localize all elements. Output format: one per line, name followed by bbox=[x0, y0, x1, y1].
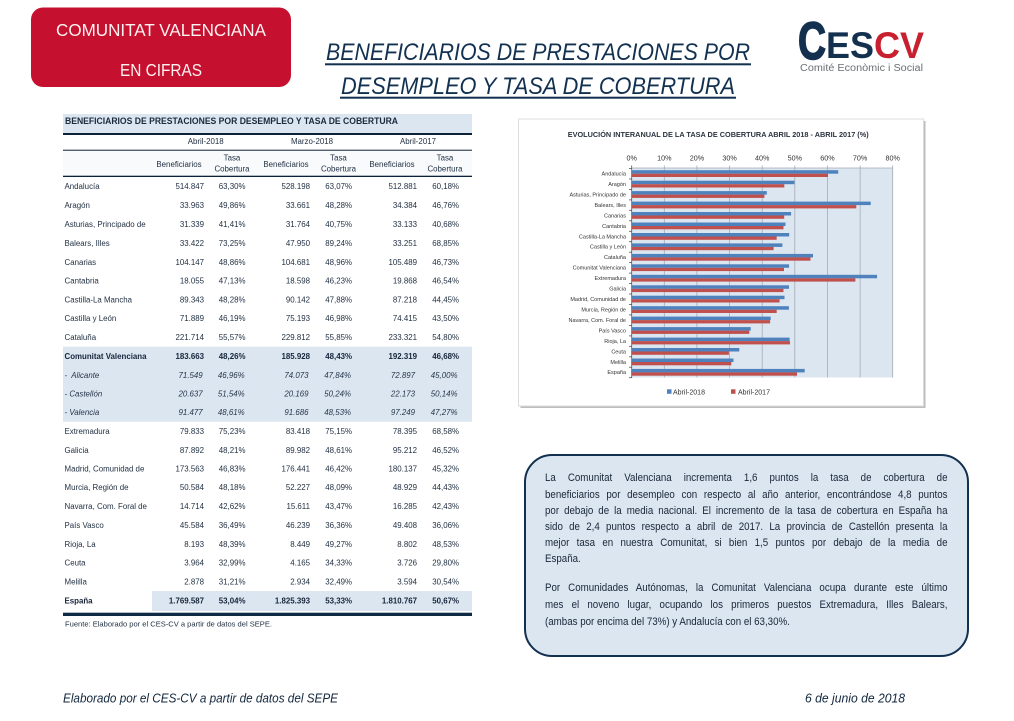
row: Melilla: 2.878 bbox=[184, 578, 205, 586]
row: Rioja bbox=[64, 540, 459, 549]
row: Madrid: 180.137 bbox=[388, 464, 417, 474]
chart legend: Abril-2017 bbox=[738, 390, 770, 396]
row: Castellón: 50,24% bbox=[324, 390, 351, 398]
row: Valencia: 91.477 bbox=[179, 408, 203, 417]
row: Asturias: 33.133 bbox=[393, 220, 418, 229]
row: Castellón bbox=[64, 390, 458, 398]
row: Melilla: 31,21% bbox=[219, 578, 246, 586]
row: Balears: 33.251 bbox=[393, 239, 417, 248]
row: Cantabria: 18.598 bbox=[286, 276, 311, 286]
row: Balears: 73,25% bbox=[219, 239, 246, 248]
row: Cantabria: 18.055 bbox=[180, 276, 205, 286]
chart x axis labels: 20% bbox=[690, 154, 705, 163]
row: Navarra bbox=[64, 502, 459, 511]
row: Andalucía: 512.881 bbox=[388, 182, 417, 191]
row: Aragón: 33.963 bbox=[180, 201, 205, 210]
table column headers: Tasa bbox=[224, 154, 241, 162]
row: Castilla y León: 46,98% bbox=[325, 314, 352, 323]
row: Madrid bbox=[64, 464, 459, 474]
row: Murcia: 44,43% bbox=[432, 483, 459, 492]
chart category labels: Extremadura bbox=[594, 276, 627, 282]
row: España: 1.825.393 bbox=[275, 596, 311, 606]
row: Rioja: 8.193 bbox=[184, 540, 205, 549]
row: Comunitat Valenciana: 48,26% bbox=[219, 352, 246, 361]
table column headers: Cobertura bbox=[214, 165, 250, 174]
row: Extremadura: 75,15% bbox=[325, 427, 352, 436]
row: Valencia: 47,27% bbox=[431, 408, 458, 417]
footer source: Elaborado por el CES-CV a partir de datos del SEPE bbox=[63, 690, 338, 706]
chart plot area bbox=[632, 168, 893, 378]
callout: text commentary: Por Comunidades Autónomas, la Comunitat Valenciana ocupa durante este último bbox=[545, 582, 948, 594]
row: Aragón: Aragón bbox=[64, 201, 90, 210]
row: Aragón: 49,86% bbox=[219, 201, 246, 210]
row: Ceuta: 3.964 bbox=[184, 558, 205, 568]
row: Comunitat Valenciana bbox=[64, 352, 459, 361]
row: Ceuta: 32,99% bbox=[219, 558, 246, 568]
row: Alicante: 72.897 bbox=[391, 371, 416, 380]
chart legend bbox=[667, 389, 770, 396]
row: Ceuta: 34,33% bbox=[325, 558, 352, 568]
row: País Vasco: 36,36% bbox=[325, 521, 352, 530]
row: Extremadura bbox=[64, 427, 459, 436]
row: Murcia: 52.227 bbox=[286, 483, 310, 492]
table heading: BENEFICIARIOS DE PRESTACIONES POR DESEMPLEO Y TASA DE COBERTURA bbox=[65, 116, 399, 126]
row: Valencia: 97.249 bbox=[391, 408, 416, 417]
row: Valencia: 48,53% bbox=[324, 408, 351, 417]
row: Aragón: 46,76% bbox=[432, 201, 459, 210]
row: Aragón bbox=[64, 201, 459, 210]
row: Andalucía: 63,30% bbox=[219, 182, 246, 191]
row: Alicante: 45,00% bbox=[431, 371, 458, 380]
row: Castilla-La Mancha: Castilla-La Mancha bbox=[64, 296, 133, 304]
row: Rioja: Rioja, La bbox=[64, 540, 96, 549]
row: Comunitat Valenciana: 183.663 bbox=[175, 352, 205, 361]
row: Rioja: 8.449 bbox=[290, 540, 311, 549]
table column headers: Abril-2018 bbox=[188, 137, 224, 146]
callout: text commentary: La Comunitat Valenciana incrementa 1,6 puntos la tasa de cobertura de bbox=[545, 472, 948, 484]
row: Rioja: 8.802 bbox=[397, 540, 417, 549]
row: Castilla y León bbox=[64, 314, 459, 323]
row: Canarias: 105.489 bbox=[388, 258, 418, 267]
row: Galicia: 48,21% bbox=[219, 446, 246, 455]
row: Extremadura: 68,58% bbox=[432, 427, 459, 436]
row: Balears bbox=[64, 239, 459, 248]
row: Rioja: 48,39% bbox=[219, 540, 246, 549]
row: Ceuta: 29,80% bbox=[432, 558, 459, 568]
row: Ceuta: 3.726 bbox=[397, 558, 418, 568]
badge: Comunitat Valenciana en cifras bbox=[31, 8, 291, 87]
chart category labels bbox=[569, 172, 627, 376]
row: Galicia: Galicia bbox=[64, 446, 89, 455]
row: Castellón: 51,54% bbox=[218, 390, 245, 398]
row: Canarias bbox=[64, 258, 459, 267]
row: Canarias: 104.147 bbox=[175, 258, 204, 267]
row: España: España bbox=[64, 596, 93, 606]
row: Balears: Balears, Illes bbox=[64, 239, 110, 248]
row: Castilla y León: 46,19% bbox=[219, 314, 246, 323]
title: DESEMPLEO Y TASA DE COBERTURA bbox=[341, 74, 735, 100]
row: Andalucía: 528.198 bbox=[281, 182, 311, 191]
row: Cataluña: 54,80% bbox=[432, 333, 459, 342]
row: Balears: 89,24% bbox=[325, 239, 352, 248]
row: Murcia: 48,18% bbox=[219, 483, 246, 492]
row: Ceuta: Ceuta bbox=[64, 558, 86, 568]
row: Murcia: 48.929 bbox=[393, 483, 418, 492]
row: Galicia: 89.982 bbox=[286, 446, 310, 455]
row: España: 53,04% bbox=[219, 596, 246, 606]
callout: text commentary: mejor tasa en nuestra Comunitat, si bien 1,5 puntos por debajo de la media de bbox=[545, 537, 948, 549]
row: Navarra: 42,62% bbox=[219, 502, 246, 511]
row: Navarra: 14.714 bbox=[180, 502, 205, 511]
table column headers: Cobertura bbox=[427, 165, 463, 174]
row: País Vasco: 49.408 bbox=[393, 521, 418, 530]
row: Murcia: Murcia, Región de bbox=[64, 483, 129, 492]
row: Castilla y León: 43,50% bbox=[432, 314, 459, 323]
chart category labels: Cantabria bbox=[602, 224, 627, 230]
chart panel: evolución interanual de la tasa de cobertura bbox=[518, 119, 926, 408]
row: Melilla: 32,49% bbox=[325, 578, 352, 586]
row: Cantabria: 47,13% bbox=[219, 276, 246, 286]
row: Castilla-La Mancha: 47,88% bbox=[325, 296, 352, 304]
chart category labels: Cataluña bbox=[604, 255, 627, 261]
row: Cataluña bbox=[64, 333, 459, 342]
row: Andalucía: Andalucía bbox=[64, 182, 100, 191]
chart series: Abril-2017 bars bbox=[632, 174, 856, 376]
row: Asturias: 31.339 bbox=[180, 220, 205, 229]
row: Galicia: 95.212 bbox=[393, 446, 417, 455]
row: Balears: 68,85% bbox=[432, 239, 459, 248]
row: Castilla-La Mancha: 87.218 bbox=[393, 296, 418, 304]
row: Aragón: 48,28% bbox=[325, 201, 352, 210]
row: Cantabria bbox=[64, 276, 459, 286]
callout: text commentary: mes el noveno lugar, ocupando los primeros puestos Extremadura, Illes Balears, bbox=[545, 599, 948, 611]
row: Navarra: 16.285 bbox=[393, 502, 418, 511]
row: Murcia bbox=[64, 483, 459, 492]
badge: Comunitat Valenciana en cifras: EN CIFRAS bbox=[120, 60, 202, 80]
row: País Vasco: 36,49% bbox=[219, 521, 246, 530]
chart category labels: Canarias bbox=[604, 213, 626, 219]
row: Canarias: Canarias bbox=[64, 258, 96, 267]
chart category labels: Andalucía bbox=[602, 172, 627, 178]
row: Melilla: 2.934 bbox=[290, 578, 311, 586]
callout: text commentary: sido de 2,4 puntos respecto a abril de 2017. La provincia de Castellón presenta la bbox=[545, 521, 948, 533]
row: País Vasco: 46.239 bbox=[286, 521, 311, 530]
row: Rioja: 49,27% bbox=[325, 540, 352, 549]
row: Galicia bbox=[64, 446, 459, 455]
table: beneficiarios y tasa de cobertura bbox=[63, 114, 472, 616]
row: Castellón: 22.173 bbox=[390, 390, 416, 398]
row: Cataluña: 55,85% bbox=[325, 333, 352, 342]
row: Asturias: 31.764 bbox=[286, 220, 311, 229]
row: Ceuta bbox=[64, 558, 459, 568]
row: Melilla bbox=[64, 578, 459, 586]
row: Canarias: 48,96% bbox=[325, 258, 352, 267]
row: Asturias: 40,75% bbox=[325, 220, 352, 229]
row: Andalucía: 514.847 bbox=[175, 182, 204, 191]
chart category labels: Castilla y León bbox=[590, 245, 626, 251]
logo: CESCV bbox=[798, 12, 924, 74]
chart category labels: Castilla-La Mancha bbox=[579, 234, 627, 240]
table column headers: Tasa bbox=[437, 154, 454, 162]
chart x axis labels: 0% bbox=[627, 154, 638, 163]
row: Alicante bbox=[64, 371, 458, 380]
chart category labels: Aragón bbox=[608, 182, 626, 188]
chart title: EVOLUCIÓN INTERANUAL DE LA TASA DE COBERTURA ABRIL 2018 - ABRIL 2017 (%) bbox=[568, 130, 869, 139]
chart category labels: Madrid, Comunidad de bbox=[570, 297, 626, 303]
row: País Vasco bbox=[64, 521, 459, 530]
row: Asturias bbox=[64, 220, 459, 229]
row: Navarra: 15.611 bbox=[286, 502, 310, 511]
row: Extremadura: 83.418 bbox=[286, 427, 311, 436]
row: Asturias: 40,68% bbox=[432, 220, 459, 229]
row: Madrid: 45,32% bbox=[432, 464, 459, 474]
row: Galicia: 46,52% bbox=[432, 446, 459, 455]
row: Melilla: 3.594 bbox=[397, 578, 418, 586]
callout: text commentary: (ambas por encima del 73%) y Andalucía con el 63,30%. bbox=[545, 616, 790, 628]
row: Melilla: 30,54% bbox=[432, 578, 459, 586]
row: Extremadura: 75,23% bbox=[219, 427, 246, 436]
chart category labels: España bbox=[607, 370, 627, 376]
row: País Vasco: 45.584 bbox=[180, 521, 205, 530]
row: Canarias: 46,73% bbox=[432, 258, 459, 267]
row: Castilla y León: 74.415 bbox=[393, 314, 418, 323]
row: Valencia bbox=[64, 408, 458, 417]
table column headers: Abril-2017 bbox=[400, 137, 436, 146]
row: Asturias: Asturias, Principado de bbox=[64, 220, 146, 229]
table column headers: Beneficiarios bbox=[263, 160, 309, 169]
chart x axis labels: 60% bbox=[820, 154, 835, 163]
row: Murcia: 48,09% bbox=[325, 483, 352, 492]
row: Aragón: 33.661 bbox=[286, 201, 310, 210]
row: Cantabria: 19.868 bbox=[393, 276, 418, 286]
chart x axis labels: 80% bbox=[886, 154, 900, 163]
row: Murcia: 50.584 bbox=[180, 483, 205, 492]
row: Castilla-La Mancha: 48,28% bbox=[219, 296, 246, 304]
row: País Vasco: País Vasco bbox=[64, 521, 104, 530]
chart category labels: Asturias, Principado de bbox=[569, 192, 626, 198]
callout: text commentary bbox=[524, 454, 969, 657]
chart category labels: Murcia, Región de bbox=[581, 308, 626, 314]
row: Cantabria: Cantabria bbox=[64, 276, 99, 286]
row: Castellón: 50,14% bbox=[431, 390, 458, 398]
chart x axis labels: 40% bbox=[755, 154, 770, 163]
logo: CESCV: Comité Econòmic i Social bbox=[800, 63, 923, 74]
table column headers: Tasa bbox=[330, 154, 347, 162]
row: Alicante: - Alicante bbox=[64, 371, 100, 380]
callout: text commentary: por debajo de la media nacional. El incremento de la tasa de cobertura en España ha bbox=[545, 505, 948, 517]
row: Valencia: 91.686 bbox=[284, 408, 309, 417]
row: Alicante: 47,84% bbox=[324, 371, 351, 380]
row: Madrid: 46,83% bbox=[219, 464, 246, 474]
row: España: 1.769.587 bbox=[169, 596, 205, 606]
row: Castilla y León: 75.193 bbox=[286, 314, 311, 323]
callout: text commentary: España. bbox=[545, 553, 581, 565]
logo: CESCV: ESCV bbox=[826, 25, 924, 66]
row: Madrid: 173.563 bbox=[175, 464, 205, 474]
row: Comunitat Valenciana: 192.319 bbox=[388, 352, 418, 361]
row: Cataluña: 55,57% bbox=[219, 333, 246, 342]
row: País Vasco: 36,06% bbox=[432, 521, 459, 530]
row: Navarra: 43,47% bbox=[325, 502, 352, 511]
row: Melilla: Melilla bbox=[64, 578, 87, 586]
row: Canarias: 48,86% bbox=[219, 258, 246, 267]
chart legend: Abril-2018 bbox=[673, 390, 705, 396]
chart x axis labels: 30% bbox=[722, 154, 737, 163]
row: Asturias: 41,41% bbox=[219, 220, 246, 229]
row: España bbox=[64, 596, 459, 606]
row: España: 1.810.767 bbox=[382, 596, 418, 606]
row: Andalucía: 63,07% bbox=[325, 182, 352, 191]
table column headers: Marzo-2018 bbox=[291, 137, 334, 146]
chart x axis labels: 50% bbox=[788, 154, 803, 163]
row: Cataluña: Cataluña bbox=[64, 333, 97, 342]
row: Extremadura: Extremadura bbox=[64, 427, 110, 436]
chart category labels: Melilla bbox=[610, 360, 627, 366]
table source note: Fuente: Elaborado por el CES-CV a partir de datos del SEPE. bbox=[65, 620, 272, 628]
logo: CESCV: C bbox=[798, 12, 826, 71]
row: Balears: 33.422 bbox=[180, 239, 204, 248]
row: Cataluña: 221.714 bbox=[175, 333, 205, 342]
row: Castilla y León: Castilla y León bbox=[64, 314, 116, 323]
row: Castilla-La Mancha: 44,45% bbox=[432, 296, 459, 304]
row: Andalucía: 60,18% bbox=[432, 182, 459, 191]
table column headers bbox=[63, 133, 472, 177]
row: Comunitat Valenciana: Comunitat Valenciana bbox=[64, 352, 147, 361]
row: Rioja: 48,53% bbox=[432, 540, 459, 549]
chart category labels: Galicia bbox=[609, 287, 627, 293]
callout: text commentary: beneficiarios por desempleo con respecto al año anterior, encontrándose 4,8 puntos bbox=[545, 489, 948, 501]
badge: Comunitat Valenciana en cifras: COMUNITAT VALENCIANA bbox=[56, 20, 266, 40]
row: Madrid: 46,42% bbox=[325, 464, 352, 474]
row: Alicante: 74.073 bbox=[284, 371, 309, 380]
row: Madrid: Madrid, Comunidad de bbox=[64, 464, 145, 474]
row: Extremadura: 78.395 bbox=[393, 427, 418, 436]
chart category labels: Ceuta bbox=[611, 349, 627, 355]
row: Cataluña: 229.812 bbox=[281, 333, 310, 342]
row: Comunitat Valenciana: 185.928 bbox=[281, 352, 311, 361]
chart category labels: País Vasco bbox=[599, 328, 626, 334]
row: Canarias: 104.681 bbox=[281, 258, 310, 267]
chart series: Abril-2018 bars bbox=[632, 170, 877, 372]
table column headers: Beneficiarios bbox=[369, 160, 415, 169]
chart category labels: Rioja, La bbox=[604, 339, 627, 345]
row: España: 53,33% bbox=[325, 596, 352, 606]
row: Castilla-La Mancha: 90.142 bbox=[286, 296, 310, 304]
row: Comunitat Valenciana: 48,43% bbox=[325, 352, 352, 361]
row: Galicia: 48,61% bbox=[325, 446, 352, 455]
chart x axis labels: 10% bbox=[657, 154, 672, 163]
chart x axis labels: 70% bbox=[853, 154, 868, 163]
row: Cantabria: 46,54% bbox=[432, 276, 459, 286]
row: Castellón: 20.169 bbox=[283, 390, 309, 398]
row: Aragón: 34.384 bbox=[393, 201, 418, 210]
row: Navarra: 42,43% bbox=[432, 502, 459, 511]
row: Alicante: 46,96% bbox=[218, 371, 245, 380]
row: España: 50,67% bbox=[432, 596, 459, 606]
row: Cantabria: 46,23% bbox=[325, 276, 352, 286]
row: Valencia: - Valencia bbox=[64, 408, 100, 417]
table heading bbox=[63, 114, 472, 134]
row: Cataluña: 233.321 bbox=[388, 333, 417, 342]
footer date: 6 de junio de 2018 bbox=[805, 690, 906, 706]
chart category labels: Comunitat Valenciana bbox=[573, 266, 627, 272]
row: Castellón: 20.637 bbox=[178, 390, 203, 398]
row: Comunitat Valenciana: 46,68% bbox=[432, 352, 459, 361]
row: Extremadura: 79.833 bbox=[180, 427, 205, 436]
row: Navarra: Navarra, Com. Foral de bbox=[64, 502, 148, 511]
row: Balears: 47.950 bbox=[286, 239, 311, 248]
row: Castilla-La Mancha: 89.343 bbox=[180, 296, 205, 304]
chart x axis labels bbox=[627, 154, 900, 163]
row: Castilla-La Mancha bbox=[64, 296, 459, 304]
row: Madrid: 176.441 bbox=[281, 464, 310, 474]
title bbox=[325, 40, 751, 100]
table column headers: Cobertura bbox=[321, 165, 357, 174]
row: Ceuta: 4.165 bbox=[290, 558, 311, 568]
chart category labels: Navarra, Com. Foral de bbox=[569, 318, 626, 324]
row: Andalucía bbox=[64, 182, 459, 191]
row: Castellón: - Castellón bbox=[64, 390, 103, 398]
row: Alicante: 71.549 bbox=[179, 371, 203, 380]
row: Castilla y León: 71.889 bbox=[180, 314, 205, 323]
title: BENEFICIARIOS DE PRESTACIONES POR bbox=[326, 40, 750, 66]
table column headers: Beneficiarios bbox=[156, 160, 202, 169]
row: Valencia: 48,61% bbox=[218, 408, 245, 417]
row: Galicia: 87.892 bbox=[180, 446, 204, 455]
chart category labels: Balears, Illes bbox=[594, 203, 626, 209]
